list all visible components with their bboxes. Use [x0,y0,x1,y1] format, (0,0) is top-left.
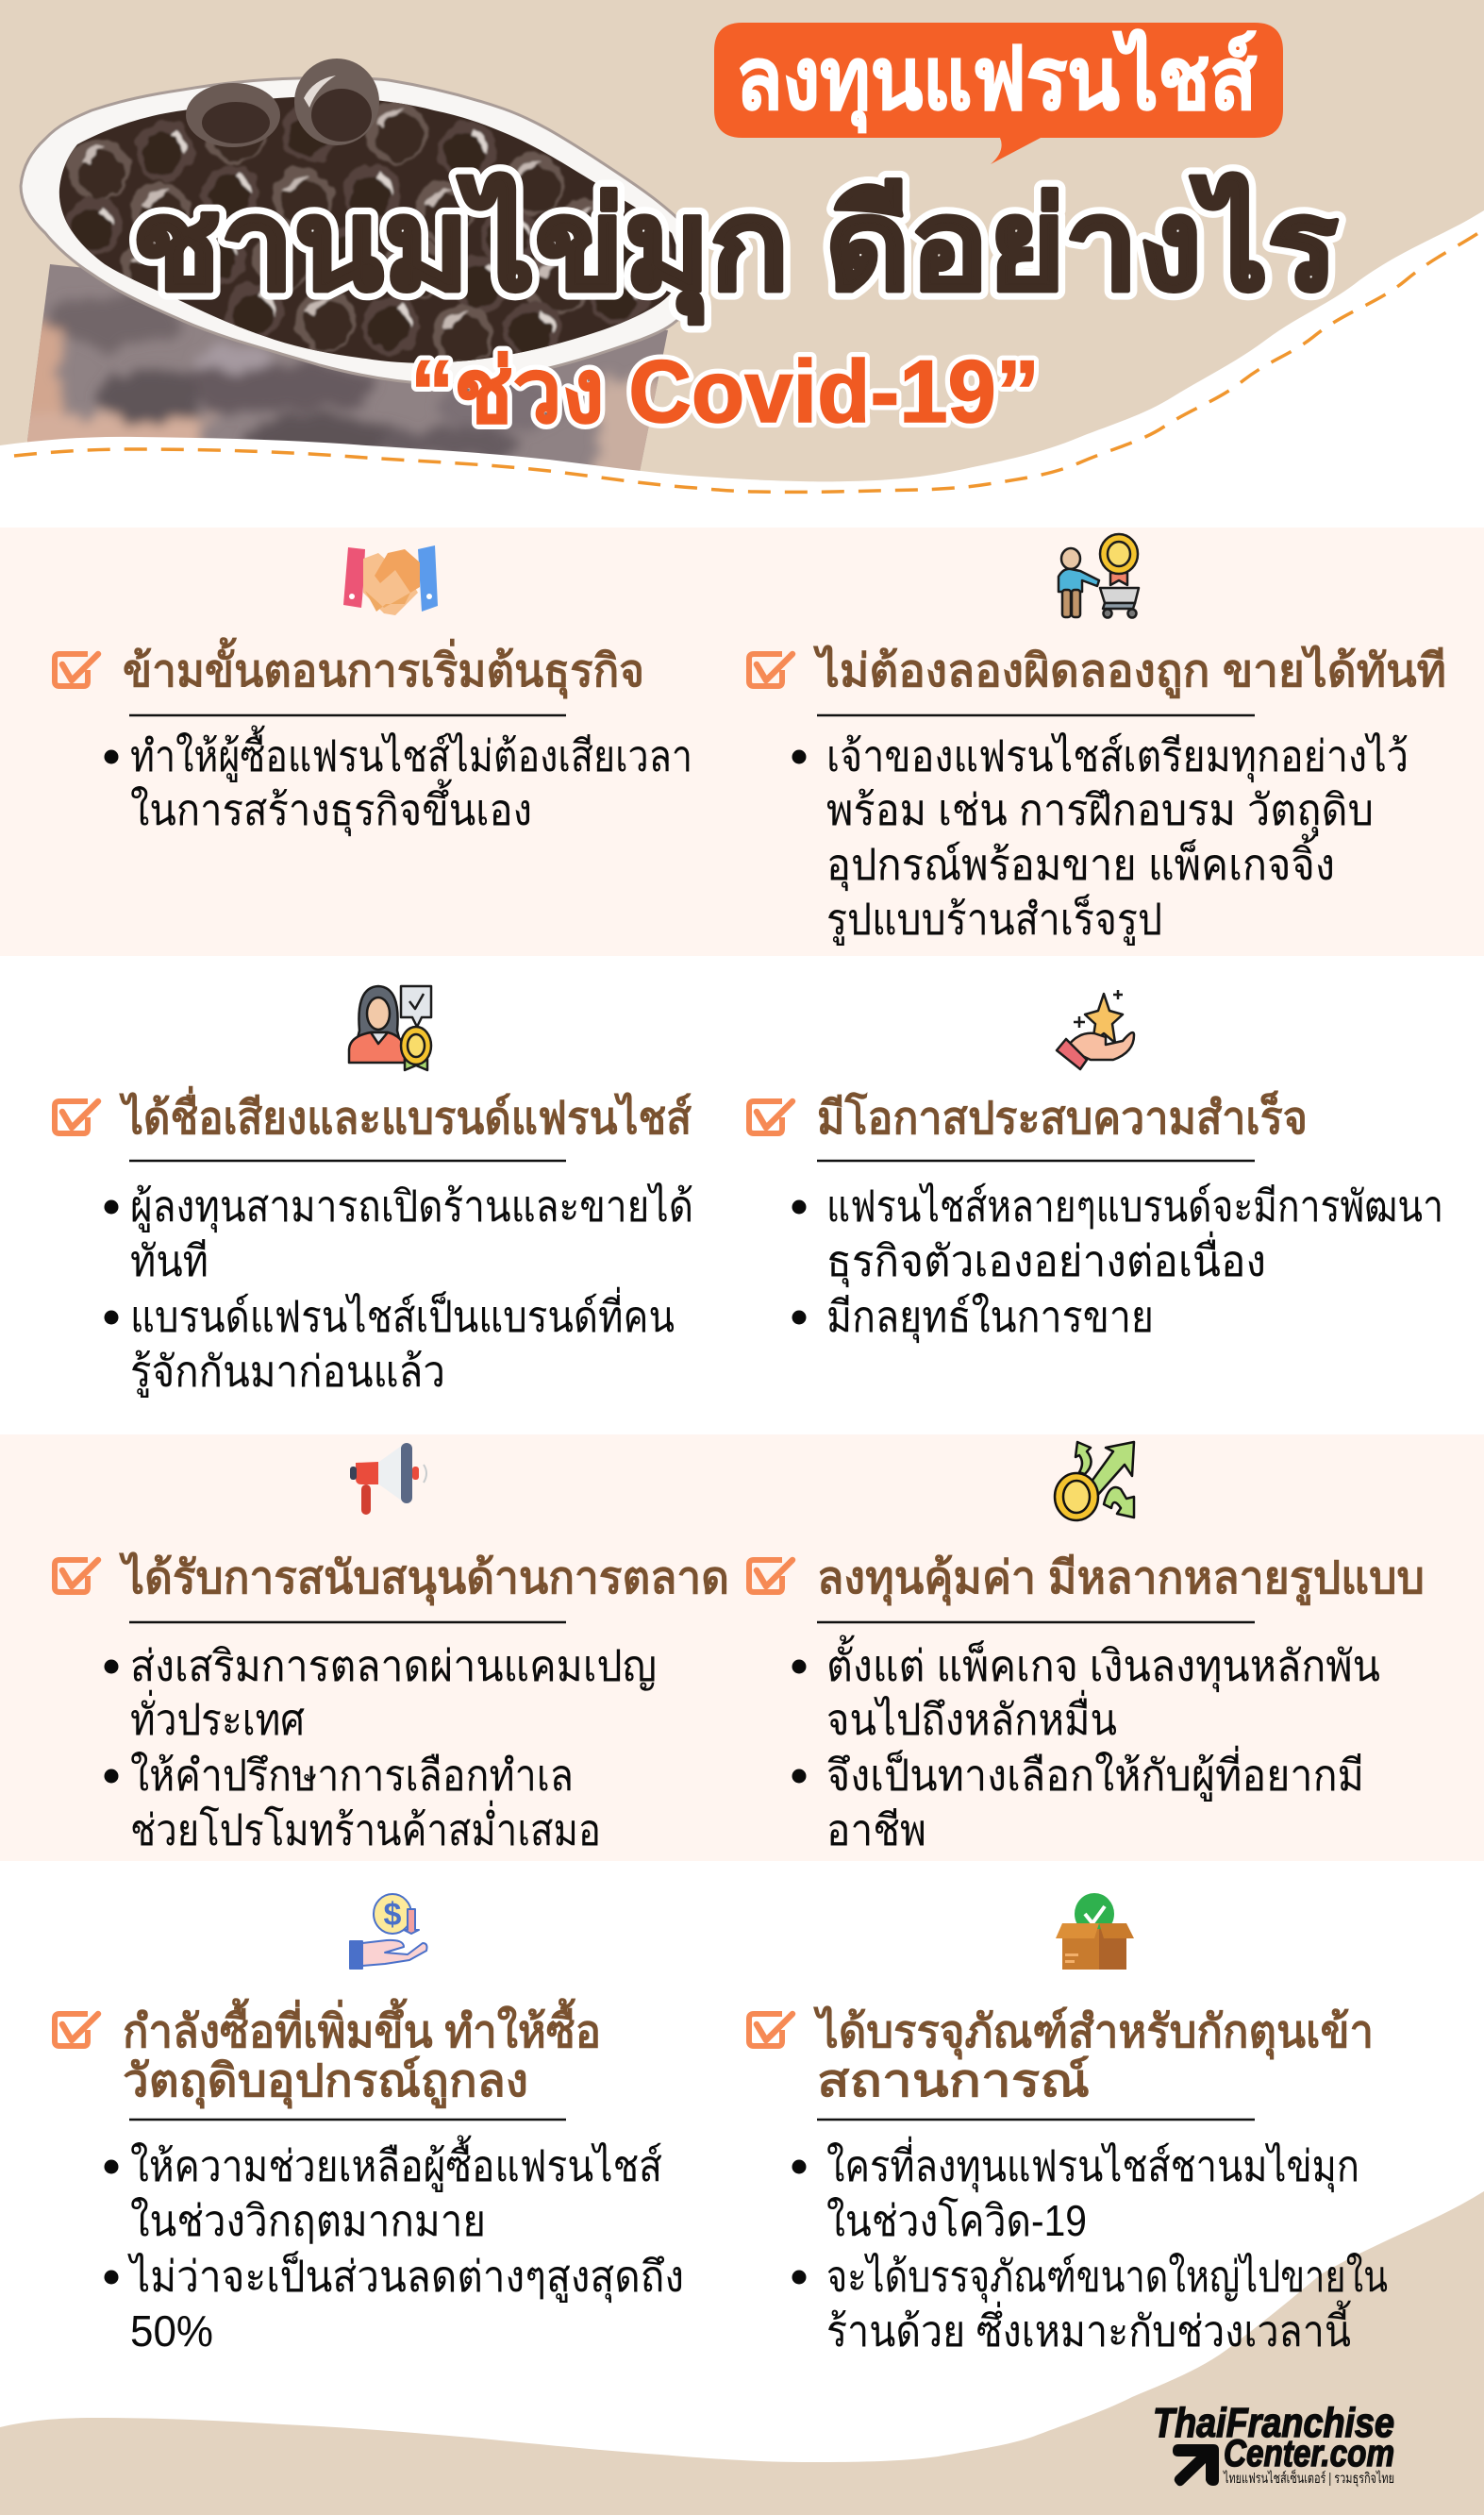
icon: hand receiving coin: $ [384,1897,402,1933]
heading: ข้ามขั้นตอนการเริ่มต้นธุรกิจ [123,637,644,699]
body text: มีกลยุทธ์ในการขาย [826,1292,1154,1344]
logo: ThaiFranchise Center: Center.com [1224,2433,1394,2474]
body text: ทำให้ผู้ซื้อแฟรนไชส์ไม่ต้องเสียเวลา [130,725,692,782]
body text: ไม่ว่าจะเป็นส่วนลดต่างๆสูงสุดถึง [126,2251,684,2304]
illustration: bubble milk tea cup [19,59,679,471]
body text: รู้จักกันมาก่อนแล้ว [130,1347,445,1398]
title: ชานมไข่มุก ดีอย่างไร [132,173,1338,324]
bottom beige wave [0,2191,1484,2515]
subtitle: “ช่วง Covid-19” [410,342,1040,441]
heading: มีโอกาสประสบความสำเร็จ [817,1090,1308,1144]
speech bubble badge: ลงทุนแฟรนไชส์ [736,29,1258,133]
check icon [55,654,98,686]
body text: เจ้าของแฟรนไชส์เตรียมทุกอย่างไว้ [826,731,1409,783]
body text: พร้อม เช่น การฝึกอบรม วัตถุดิบ [826,785,1374,837]
check icon [749,1101,792,1133]
subtitle: “ช่วง Covid-19” [410,342,1040,441]
body text: รูปแบบร้านสำเร็จรูป [826,894,1162,946]
panel: packaging stock [749,1893,1388,2356]
body text: ในการสร้างธุรกิจขึ้นเอง [130,779,532,837]
heading: ได้บรรจุภัณฑ์สำหรับกักตุนเข้า [812,2004,1374,2060]
body text: ทันที [130,1236,208,1285]
body text: อุปกรณ์พร้อมขาย แพ็คเกจจิ้ง [826,833,1335,892]
panel: no trial and error [749,534,1446,946]
body text [104,1182,693,1398]
icon: coin with arrows [1055,1442,1134,1520]
panel: marketing support [55,1443,729,1854]
body text: ตั้งแต่ แพ็คเกจ เงินลงทุนหลักพัน [826,1635,1380,1693]
bottom wave of header with dashed line [0,210,1484,528]
body text [104,725,692,837]
icon: megaphone [350,1443,426,1515]
body text: อาชีพ [826,1805,926,1854]
boba pearls rising over the rim [186,59,379,147]
body text: ให้ความช่วยเหลือผู้ซื้อแฟรนไชส์ [130,2135,662,2192]
heading: สถานการณ์ [817,2055,1090,2106]
heading: ได้ชื่อเสียงและแบรนด์แฟรนไชส์ [118,1085,692,1144]
body text: ในช่วงโควิด-19 [826,2196,1087,2245]
heading: วัตถุดิบอุปกรณ์ถูกลง [123,2055,528,2109]
body text: ธุรกิจตัวเองอย่างต่อเนื่อง [826,1231,1266,1288]
body text: ให้คำปรึกษาการเลือกทำเล [130,1751,574,1800]
heading [812,2004,1374,2106]
body text: แบรนด์แฟรนไชส์เป็นแบรนด์ที่คน [130,1286,675,1341]
heading: กำลังซื้อที่เพิ่มขึ้น ทำให้ซื้อ [123,1998,601,2057]
check icon [55,1101,98,1133]
body text: จึงเป็นทางเลือกให้กับผู้ที่อยากมี [826,1745,1364,1802]
body text: 50% [130,2306,213,2356]
body text [792,1182,1443,1344]
icon: hand receiving coin [350,1894,426,1969]
body text: จนไปถึงหลักหมื่น [826,1689,1117,1744]
logo: ThaiFranchise Center: ThaiFranchise [1153,2400,1394,2446]
body text [792,1635,1380,1854]
body text [104,1641,657,1854]
body text: ช่วยโปรโมทร้านค้าสม่ำเสมอ [130,1800,601,1854]
title: ชานมไข่มุก ดีอย่างไร [132,173,1338,324]
body text: ใครที่ลงทุนแฟรนไชส์ชานมไข่มุก [826,2136,1359,2193]
background band row 3 [0,1434,1484,1861]
icon: arrow [1173,2444,1219,2486]
background band row 1 [0,528,1484,956]
heading: ได้รับการสนับสนุนด้านการตลาด [118,1551,729,1606]
panel: worthwhile investment [749,1442,1425,1854]
logo: ThaiFranchise Center [1153,2400,1394,2488]
panel: brand reputation [55,986,693,1398]
check icon [55,1560,98,1592]
speech bubble badge [714,23,1283,164]
heading: ไม่ต้องลองผิดลองถูก ขายได้ทันที [812,644,1446,699]
body text: ทั่วประเทศ [130,1689,305,1744]
panel: purchasing power [55,1894,684,2356]
body text [792,731,1409,946]
icon: handshake [343,545,438,615]
panel: skip startup steps [55,545,692,837]
heading [123,1998,601,2109]
body text: ส่งเสริมการตลาดผ่านแคมเปญ [130,1641,657,1690]
header background [0,0,1484,510]
body text [104,2135,684,2356]
heading: ลงทุนคุ้มค่า มีหลากหลายรูปแบบ [817,1553,1425,1606]
icon: shopper with cart and coin [1059,534,1139,617]
body text: ร้านด้วย ซึ่งเหมาะกับช่วงเวลานี้ [826,2300,1351,2356]
body text: ในช่วงวิกฤตมากมาย [130,2196,486,2245]
icon: box with green check [1056,1893,1134,1970]
body text: ผู้ลงทุนสามารถเปิดร้านและขายได้ [130,1182,693,1233]
body text [792,2136,1388,2356]
check icon [55,2014,98,2046]
check icon [749,1560,792,1592]
logo: ThaiFranchise Center: ไทยแฟรนไชส์เซ็นเตอร์ | รวมธุรกิจไทย [1223,2469,1394,2488]
icon: businesswoman with badge [349,986,431,1070]
icon: hand holding star [1057,990,1134,1069]
check icon [749,2014,792,2046]
panel: opportunity for success [749,990,1443,1344]
check icon [749,654,792,686]
